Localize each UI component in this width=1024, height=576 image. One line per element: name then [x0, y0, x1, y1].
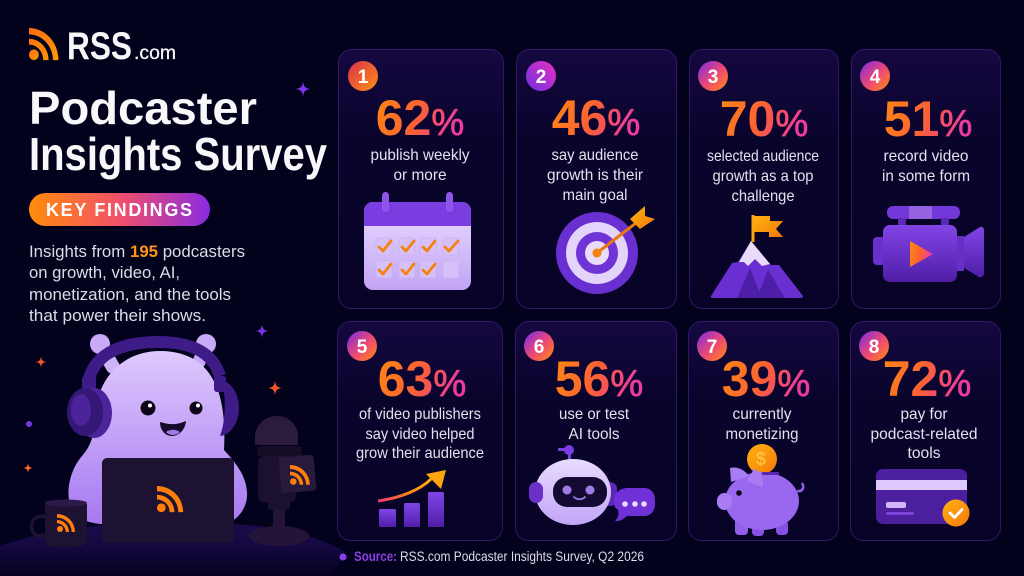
mascot body [68, 351, 247, 524]
description: monetizing [726, 426, 798, 443]
number badge 5 [347, 331, 377, 361]
icon: piggy bank with coin: $ [756, 449, 766, 469]
intro text: that power their shows. [29, 307, 206, 325]
number badge 3 [698, 61, 728, 91]
description: pay for [900, 406, 948, 423]
icon: target with arrow [556, 206, 655, 294]
headphone band [88, 342, 220, 382]
description: record video [884, 148, 969, 165]
description: AI tools [568, 426, 620, 443]
source note: RSS.com Podcaster Insights Survey, Q2 2026 [400, 549, 644, 564]
icon: bar chart with rising arrow [378, 470, 446, 527]
description: in some form [882, 168, 970, 185]
description [870, 406, 978, 462]
number badge 5: 5 [357, 337, 368, 358]
mascot antennae [90, 334, 216, 367]
title: Podcaster [29, 82, 257, 134]
description: podcast-related [870, 426, 978, 443]
intro text [29, 243, 245, 325]
description [882, 148, 970, 185]
description: use or test [559, 406, 630, 423]
stat 39%: 39% [722, 351, 810, 407]
intro text: Insights from 195 podcasters [29, 243, 245, 261]
number badge 2: 2 [536, 67, 546, 88]
title [29, 82, 327, 180]
badge: key findings: KEY FINDINGS [46, 200, 192, 220]
headphone cups [67, 376, 239, 438]
number badge 2 [526, 61, 556, 91]
icon: robot with speech bubble [529, 445, 655, 525]
description: publish weekly [370, 147, 470, 164]
number badge 1 [348, 61, 378, 91]
stat 46%: 46% [552, 90, 640, 146]
number badge 1: 1 [358, 67, 369, 88]
icon: RSS logo [29, 28, 58, 60]
stat 56%: 56% [555, 351, 643, 407]
description: grow their audience [356, 445, 484, 462]
panel 1: publish weekly [338, 50, 504, 308]
stat 63%: 63% [378, 351, 466, 407]
number badge 7 [697, 331, 727, 361]
icon: video camera [873, 206, 984, 282]
badge: key findings [29, 193, 210, 226]
icon: mountain with flag [711, 215, 803, 298]
description [370, 147, 470, 184]
description: main goal [562, 187, 628, 204]
coffee mug [32, 500, 87, 547]
panel 2: audience growth goal [516, 50, 676, 308]
number badge 4 [860, 61, 890, 91]
number badge 4: 4 [870, 67, 881, 88]
stat 51%: 51% [884, 91, 972, 147]
decorative sparkles [23, 82, 310, 473]
description: growth is their [547, 167, 644, 184]
logo wordmark RSS: RSS [67, 25, 132, 68]
description [356, 406, 484, 462]
icon: credit card with check [876, 469, 970, 526]
description: growth as a top [712, 168, 814, 185]
number badge 8: 8 [869, 337, 879, 358]
laptop [102, 458, 234, 543]
stat 62%: 62% [376, 90, 464, 146]
description: of video publishers [359, 406, 481, 423]
logo: RSS.com [29, 25, 176, 68]
intro text: on growth, video, AI, [29, 264, 180, 282]
stat 70%: 70% [720, 91, 808, 147]
number badge 8 [859, 331, 889, 361]
icon: calendar [364, 192, 471, 290]
illustration: podcaster mascot at desk [0, 334, 345, 576]
description: challenge [732, 188, 795, 205]
microphone [249, 416, 317, 546]
description: selected audience [707, 148, 819, 165]
intro text: monetization, and the tools [29, 286, 231, 304]
description: say video helped [366, 426, 474, 443]
description: currently [732, 406, 792, 423]
description: say audience [552, 147, 639, 164]
panel 6: AI tools [516, 322, 676, 540]
panel 7: monetizing [688, 322, 838, 540]
description [726, 406, 798, 443]
number badge 6: 6 [534, 337, 544, 358]
panel 3: top challenge [690, 50, 838, 308]
panel 4: record video [852, 50, 1000, 308]
number badge 6 [524, 331, 554, 361]
description: or more [394, 167, 447, 184]
logo wordmark .com: .com [134, 43, 176, 64]
stat 72%: 72% [883, 351, 971, 407]
number badge 3: 3 [708, 67, 718, 88]
panel 8: paid tools [850, 322, 1000, 540]
description [707, 148, 819, 205]
panel 5: video helped growth [338, 322, 502, 540]
desk surface [0, 521, 345, 576]
description [559, 406, 630, 443]
description [547, 147, 644, 204]
title: Insights Survey [29, 128, 327, 180]
icon: piggy bank with coin [717, 444, 803, 536]
number badge 7: 7 [707, 337, 717, 358]
mascot face [140, 400, 202, 436]
description: tools [908, 445, 940, 462]
source note: Source: [354, 549, 397, 564]
